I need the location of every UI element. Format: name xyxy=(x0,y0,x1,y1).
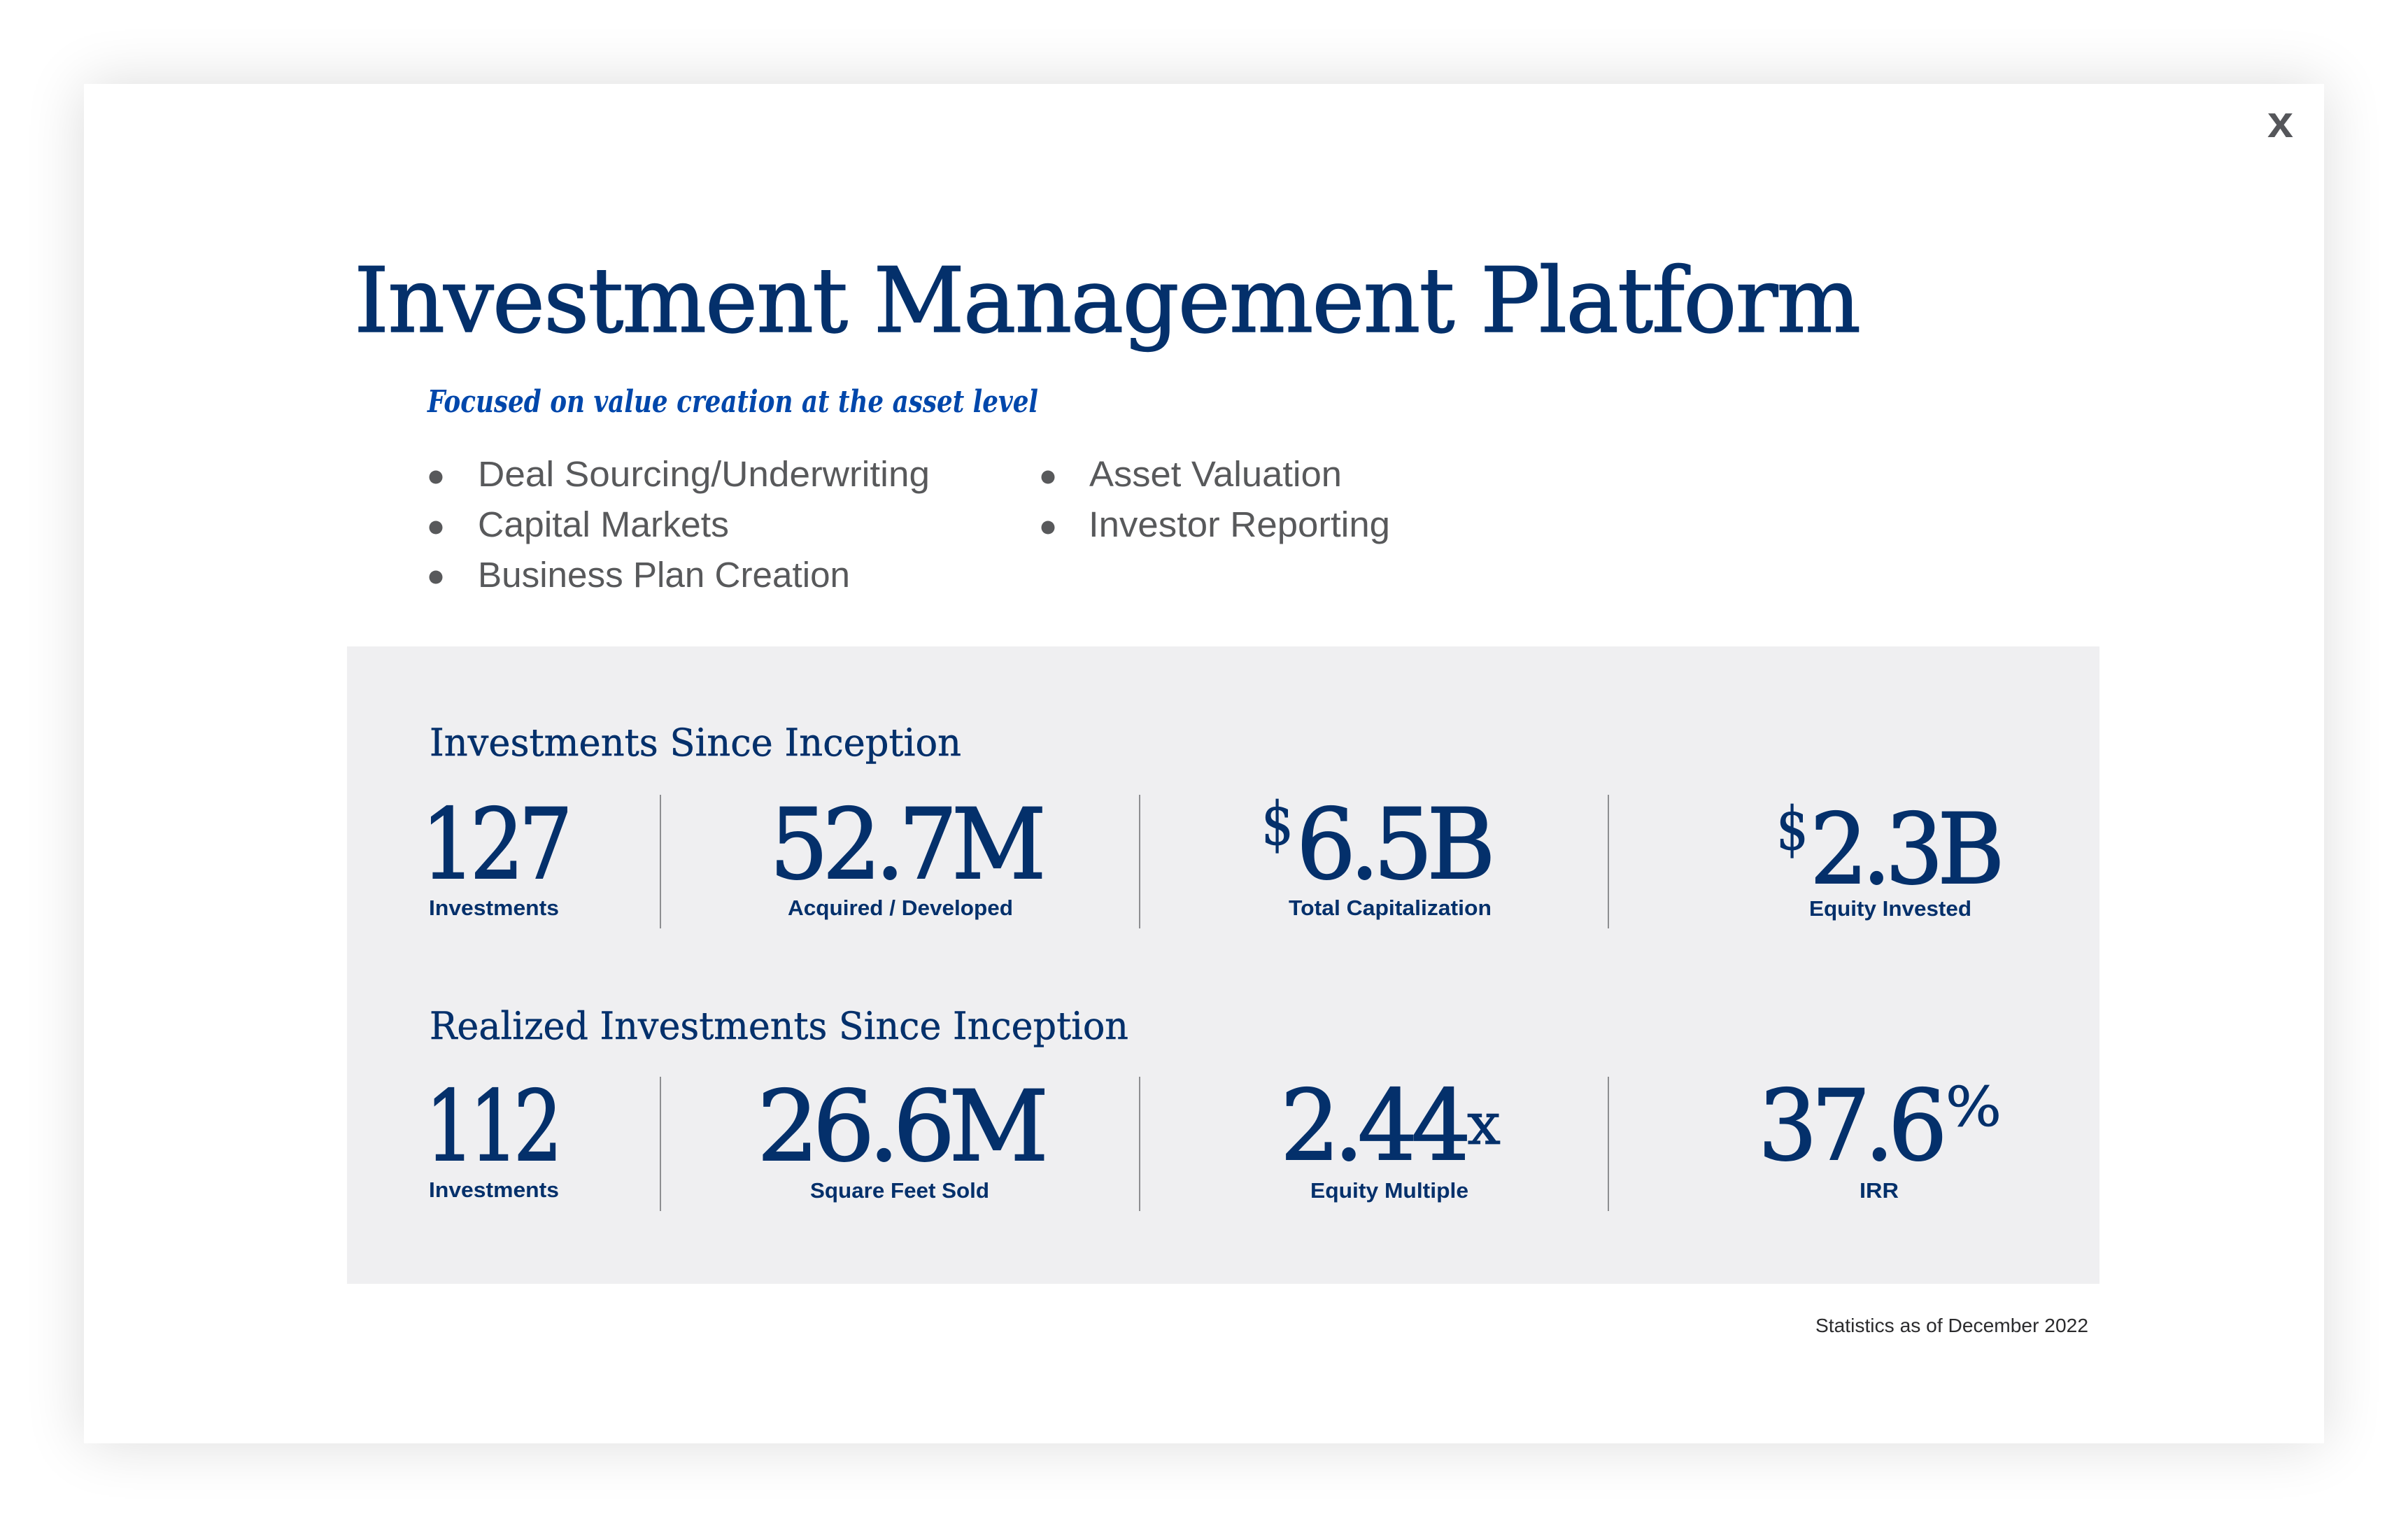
bullet list: column one xyxy=(430,454,930,595)
stat: $6.5B total capitalization: $ xyxy=(1261,790,1294,859)
bullet list: column two: Asset Valuation xyxy=(1089,454,1342,494)
stat: $2.3B equity invested: 2.3B xyxy=(1810,793,1999,906)
bullet list: column two xyxy=(1041,454,1390,544)
panel: statistics background xyxy=(347,646,2099,1284)
bullet list: column one: Business Plan Creation xyxy=(478,555,850,595)
heading: investments since inception: Investments Since Inception xyxy=(430,721,961,765)
bullet list: column one: Capital Markets xyxy=(478,504,729,544)
stat: 2.44x equity multiple: Equity Multiple xyxy=(1310,1178,1468,1203)
subtitle: Focused on value creation at the asset level xyxy=(426,384,1038,420)
stat: $2.3B equity invested: $ xyxy=(1776,795,1808,864)
footnote: Statistics as of December 2022 xyxy=(1815,1315,2088,1336)
stat: $2.3B equity invested: Equity Invested xyxy=(1809,896,1971,921)
bullet list: column two: Investor Reporting xyxy=(1089,504,1390,544)
stat: 52.7M acquired / developed: 52.7M xyxy=(770,788,1042,901)
stat: 52.7M acquired / developed: Acquired / Developed xyxy=(788,896,1013,920)
title: Investment Management Platform xyxy=(354,249,1860,353)
stat: $6.5B total capitalization: Total Capitalization xyxy=(1289,896,1492,920)
stat: 2.44x equity multiple: x xyxy=(1467,1091,1501,1158)
stat: 2.44x equity multiple: 2.44 xyxy=(1280,1069,1466,1182)
stat: 127 investments: Investments xyxy=(429,896,559,920)
stat: 127 investments: 127 xyxy=(421,788,567,901)
icon: close x: x xyxy=(2267,97,2293,147)
stat: 37.6% IRR: IRR xyxy=(1860,1178,1899,1203)
stat: $6.5B total capitalization: 6.5B xyxy=(1296,788,1490,901)
heading: realized investments since inception: Realized Investments Since Inception xyxy=(430,1004,1128,1048)
stat: 37.6% IRR: % xyxy=(1946,1076,2002,1139)
stat: 37.6% IRR xyxy=(1758,1069,2002,1203)
stat: 112 investments: Investments xyxy=(429,1177,559,1202)
stat: 37.6% IRR: 37.6 xyxy=(1758,1069,1942,1182)
stat: 26.6M square feet sold: Square Feet Sold xyxy=(810,1178,989,1203)
bullet list: column one: Deal Sourcing/Underwriting xyxy=(478,454,930,494)
stat: 112 investments: 112 xyxy=(425,1070,558,1183)
stat: 26.6M square feet sold: 26.6M xyxy=(757,1070,1044,1183)
